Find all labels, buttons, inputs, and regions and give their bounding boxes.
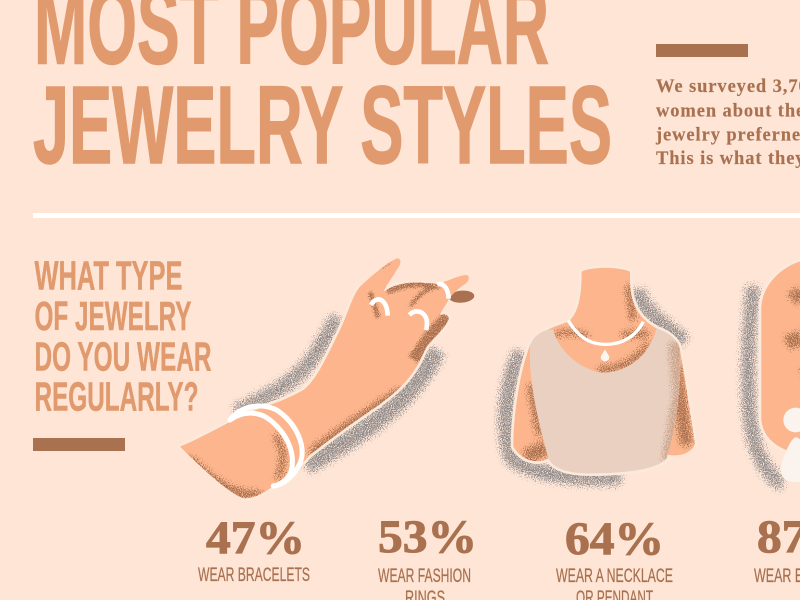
title [33,0,612,187]
accent bar: section [33,438,125,451]
stat: necklace or pendant: 64% [565,513,664,565]
earring icon shadow [748,283,785,485]
stat: bracelets [198,512,310,586]
bracelets [230,406,302,486]
intro text block [655,77,800,169]
section heading: what type of jewelry: WHAT TYPE [34,252,182,298]
necklace [568,321,643,344]
stat: fashion rings [378,511,477,600]
stat: earrings [754,511,800,587]
stat: necklace or pendant: WEAR A NECKLACE [556,566,673,587]
stat: necklace or pendant [556,513,673,600]
icon: ear with earrings [760,260,800,483]
stat: fashion rings: WEAR FASHION [378,566,471,587]
icon: hand with bracelets and rings [180,258,475,498]
accent bar: intro [656,44,748,57]
pendant [601,349,609,361]
garment top [530,328,682,473]
icon: bust with necklace and pendant [506,260,800,485]
rings [371,284,449,330]
section heading: what type of jewelry: REGULARLY? [34,374,198,420]
stat: fashion rings: 53% [378,511,477,563]
section heading: what type of jewelry: OF JEWELRY [34,293,192,339]
section heading: what type of jewelry: DO YOU WEAR [34,334,212,380]
stat: bracelets: WEAR BRACELETS [198,565,310,586]
section heading: what type of jewelry [34,252,212,420]
section divider [33,213,800,218]
stat: bracelets: 47% [206,512,305,564]
